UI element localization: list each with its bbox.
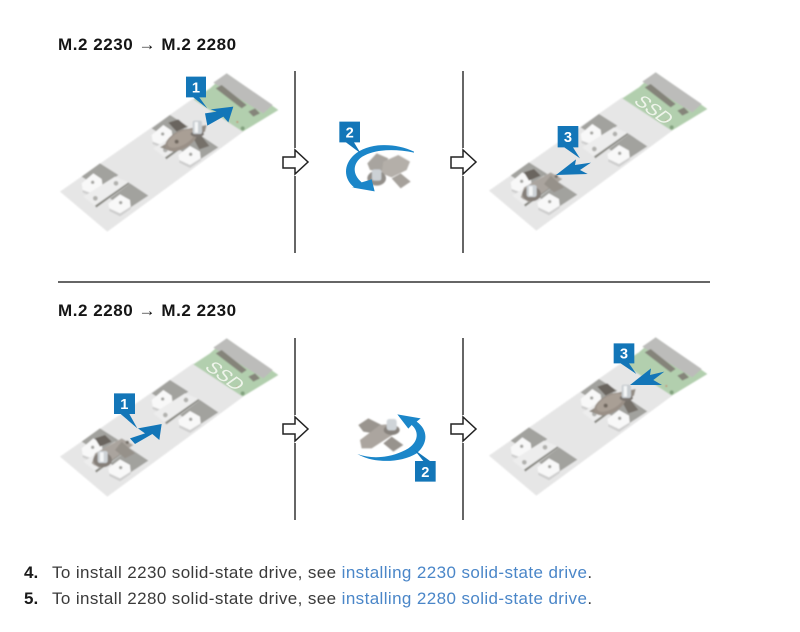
divider arrow 2 — [451, 71, 476, 253]
heading: M.2 2280 to M.2 2230: M.2 2280 → M.2 2230 — [58, 301, 237, 320]
callout badge 3: 3 — [620, 347, 628, 363]
callout arrow — [556, 159, 591, 175]
panel: step 2 rotate bracket reverse — [357, 414, 436, 482]
callout badge 1: 1 — [192, 80, 200, 96]
panel: step 2 rotate bracket — [339, 122, 414, 191]
rotation arrow — [346, 145, 414, 191]
callout arrow — [130, 424, 162, 444]
panel: step 1 slide bracket from 2280 position — [60, 338, 278, 497]
callout badge 1 — [114, 393, 137, 428]
ssd board illustration — [489, 72, 707, 231]
callout arrow — [205, 107, 233, 126]
ssd board illustration — [60, 338, 278, 497]
step 5 text: To install 2280 solid-state drive, see installing 2280 solid-state drive. — [52, 589, 592, 608]
ssd label: SSD — [629, 93, 678, 128]
ssd board illustration — [60, 73, 278, 232]
callout arrow — [630, 368, 664, 385]
callout badge 2: 2 — [346, 126, 354, 142]
callout badge 2: 2 — [421, 465, 429, 481]
callout badge 1: 1 — [120, 397, 128, 413]
section divider — [58, 281, 710, 283]
bracket plate — [358, 418, 403, 452]
callout badge 3 — [558, 126, 580, 158]
rotation arrow — [357, 414, 425, 461]
panel: step 3 bracket in 2230 position — [489, 337, 707, 496]
panel: step 3 bracket in 2280 position — [489, 72, 707, 231]
bracket plate — [367, 153, 411, 188]
panel: step 1 slide bracket towards connector — [60, 73, 278, 232]
step 4 text: To install 2230 solid-state drive, see installing 2230 solid-state drive. — [52, 563, 592, 582]
callout badge 3 — [614, 343, 636, 374]
divider arrow 1 — [283, 71, 308, 253]
step 4 text: 4. — [24, 563, 38, 582]
heading: M.2 2230 to M.2 2280: M.2 2230 → M.2 2280 — [58, 35, 237, 54]
ssd label: SSD — [200, 359, 249, 394]
ssd board illustration — [489, 337, 707, 496]
callout badge 1 — [186, 77, 207, 108]
divider arrow 3 — [283, 338, 308, 520]
divider arrow 4 — [451, 338, 476, 520]
step 5 text: 5. — [24, 589, 38, 608]
callout badge 3: 3 — [564, 130, 572, 146]
